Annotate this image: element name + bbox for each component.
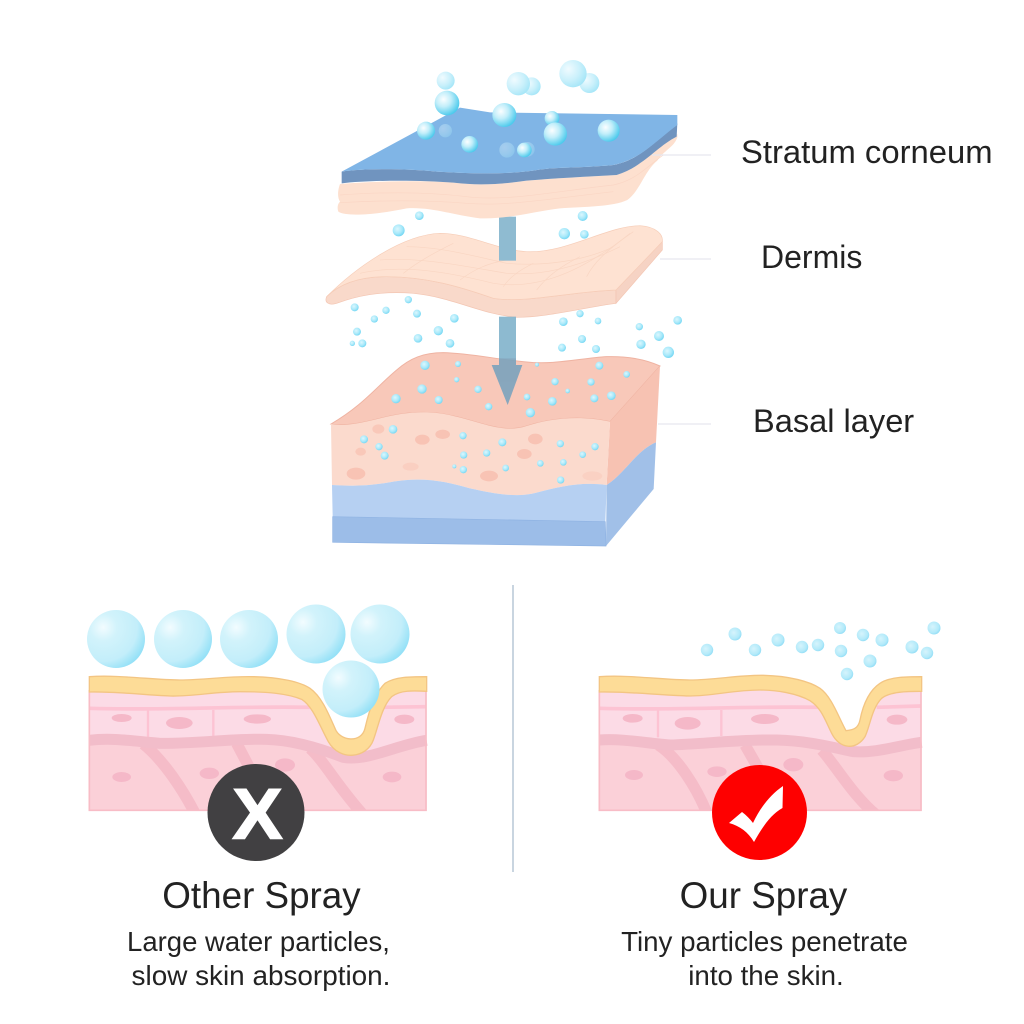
skin cross-section left: [89, 676, 427, 817]
label: dermis: Dermis: [761, 239, 862, 275]
blotches: [347, 424, 602, 481]
tiny water particles: [701, 622, 940, 680]
dermis right edge: [616, 242, 662, 303]
basal front blue: [332, 480, 607, 522]
basal right face blue: [606, 442, 656, 546]
basal top surface: [331, 353, 660, 429]
dermis grid lines: [360, 232, 633, 290]
label: basal layer: Basal layer: [753, 402, 914, 439]
text: other spray description: slow skin absorption.: [132, 960, 390, 991]
bubbles: upper: [393, 60, 620, 239]
leader lines and layer labels: [652, 133, 993, 439]
dermis front edge: [326, 277, 616, 317]
icon: x badge: [208, 764, 304, 861]
layer: basal block: [331, 353, 660, 546]
stratum lines: [340, 155, 663, 204]
basal front peach: [331, 412, 610, 495]
basal right face peach: [607, 366, 660, 485]
skin cross-section right: [599, 675, 922, 817]
large water particles: [87, 604, 410, 718]
icon: x badge: X: [232, 774, 283, 854]
text: other spray description: Large water particles,: [127, 926, 390, 957]
panel: other spray: [87, 604, 427, 991]
dermis top surface: [327, 226, 662, 300]
diagram: skin layers: [326, 60, 682, 546]
text: our spray description: Tiny particles penetrate: [621, 926, 908, 957]
icon: check badge: [712, 765, 807, 860]
heading: other spray: Other Spray: [162, 875, 361, 916]
stratum top surface: [342, 108, 677, 173]
basal front dark blue: [333, 517, 606, 546]
arrow lower with head: [492, 317, 522, 405]
arrow segment upper: [499, 217, 516, 261]
text: our spray description: into the skin.: [688, 960, 844, 991]
layer: dermis and stratum corneum: [326, 108, 677, 317]
divider: [512, 585, 514, 872]
stratum peach: [338, 134, 677, 218]
panel: our spray: [599, 622, 940, 991]
bubbles: lower: [350, 296, 682, 484]
heading: our spray: Our Spray: [680, 875, 848, 916]
stratum dark edge: [342, 123, 677, 184]
label: stratum corneum: Stratum corneum: [741, 133, 993, 170]
